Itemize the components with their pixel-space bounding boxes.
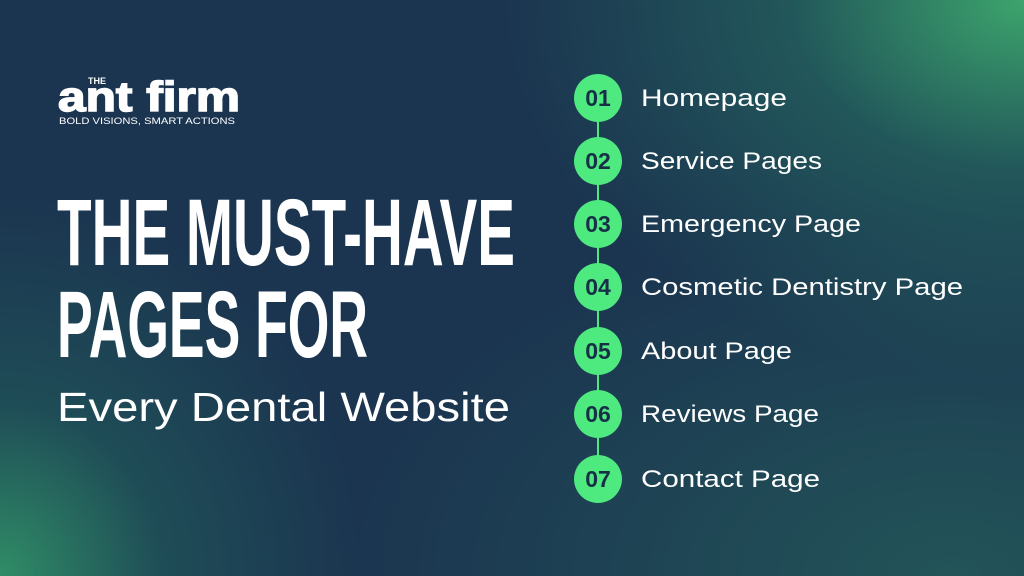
item 07: 07 [585, 466, 611, 492]
item 02: Service Pages [641, 148, 822, 175]
logo: BOLD VISIONS, SMART ACTIONS [59, 116, 235, 127]
item 07 [574, 455, 820, 503]
logo: THE [88, 76, 106, 86]
item 02 [574, 137, 822, 185]
title: THE MUST-HAVE [57, 180, 515, 286]
item 06: 06 [585, 401, 611, 427]
item 02: 02 [585, 148, 611, 174]
item 04: Cosmetic Dentistry Page [641, 274, 963, 301]
item 03: 03 [585, 211, 611, 237]
item 04 [574, 263, 963, 311]
item 01 [574, 74, 787, 122]
item 06 [574, 390, 819, 438]
item 05: 05 [585, 338, 611, 364]
item 03 [574, 200, 861, 248]
item 01: 01 [585, 85, 611, 111]
item 07: Contact Page [641, 466, 820, 493]
item 03: Emergency Page [641, 211, 861, 238]
item 04: 04 [585, 274, 611, 300]
item 05: About Page [641, 338, 792, 365]
item 01: Homepage [641, 85, 787, 112]
subtitle: Every Dental Website [57, 384, 510, 430]
item 05 [574, 327, 792, 375]
list items [574, 74, 963, 503]
timeline line [597, 98, 599, 479]
logo: ant firm [58, 73, 240, 120]
title: PAGES FOR [57, 272, 368, 378]
item 06: Reviews Page [641, 401, 819, 428]
title [57, 180, 515, 378]
